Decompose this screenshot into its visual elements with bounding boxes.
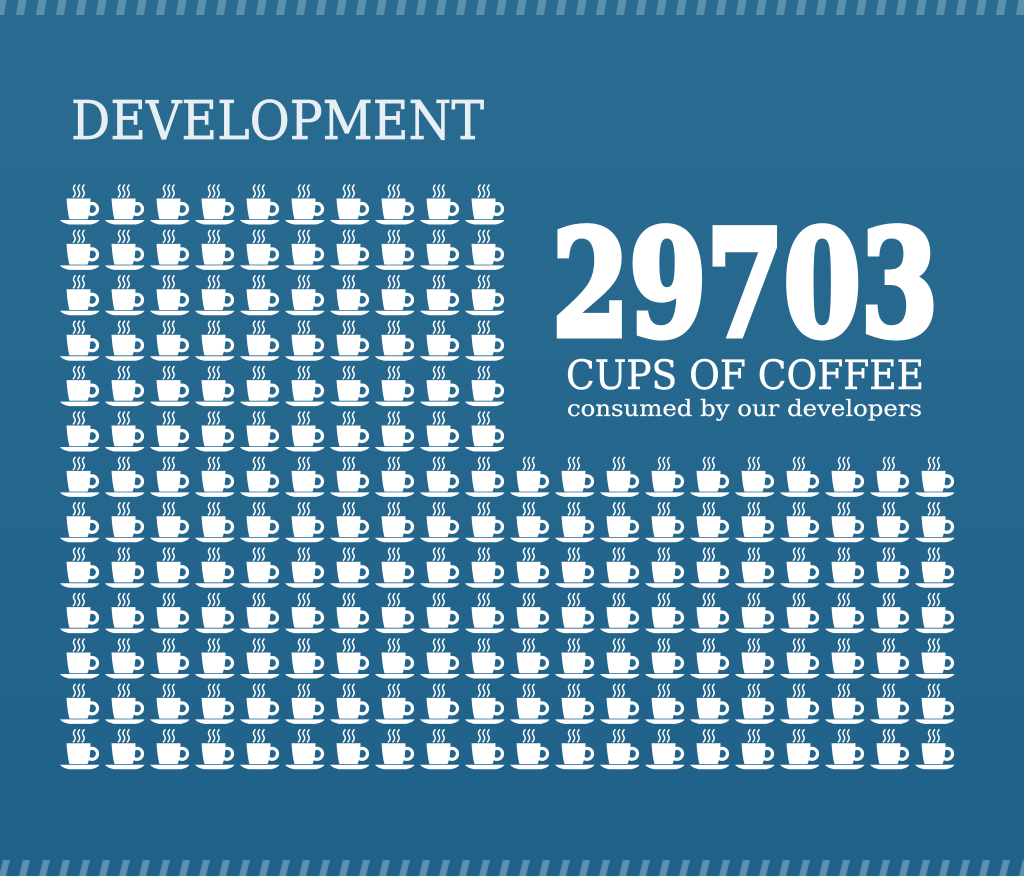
coffee cup grid xyxy=(60,184,954,769)
title: DEVELOPMENT xyxy=(71,91,484,152)
caption: consumed by our developers: consumed by our developers xyxy=(567,397,922,422)
cup row 1 xyxy=(60,184,504,224)
cup row 3 xyxy=(60,275,504,315)
cup row 9 xyxy=(60,548,954,588)
cup row 13 xyxy=(60,729,954,769)
subheading: cups of coffee: CUPS OF COFFEE xyxy=(566,353,924,399)
bottom stripe band xyxy=(0,860,1024,876)
cup row 4 xyxy=(60,321,504,361)
cup row 6 xyxy=(60,412,504,452)
cup row 10 xyxy=(60,593,954,633)
cup row 11 xyxy=(60,638,954,678)
cup row 8 xyxy=(60,502,954,542)
cup row 2 xyxy=(60,230,504,270)
cup row 12 xyxy=(60,684,954,724)
cup row 7 xyxy=(60,457,954,497)
top stripe band xyxy=(0,0,1024,15)
cup row 5 xyxy=(60,366,504,406)
